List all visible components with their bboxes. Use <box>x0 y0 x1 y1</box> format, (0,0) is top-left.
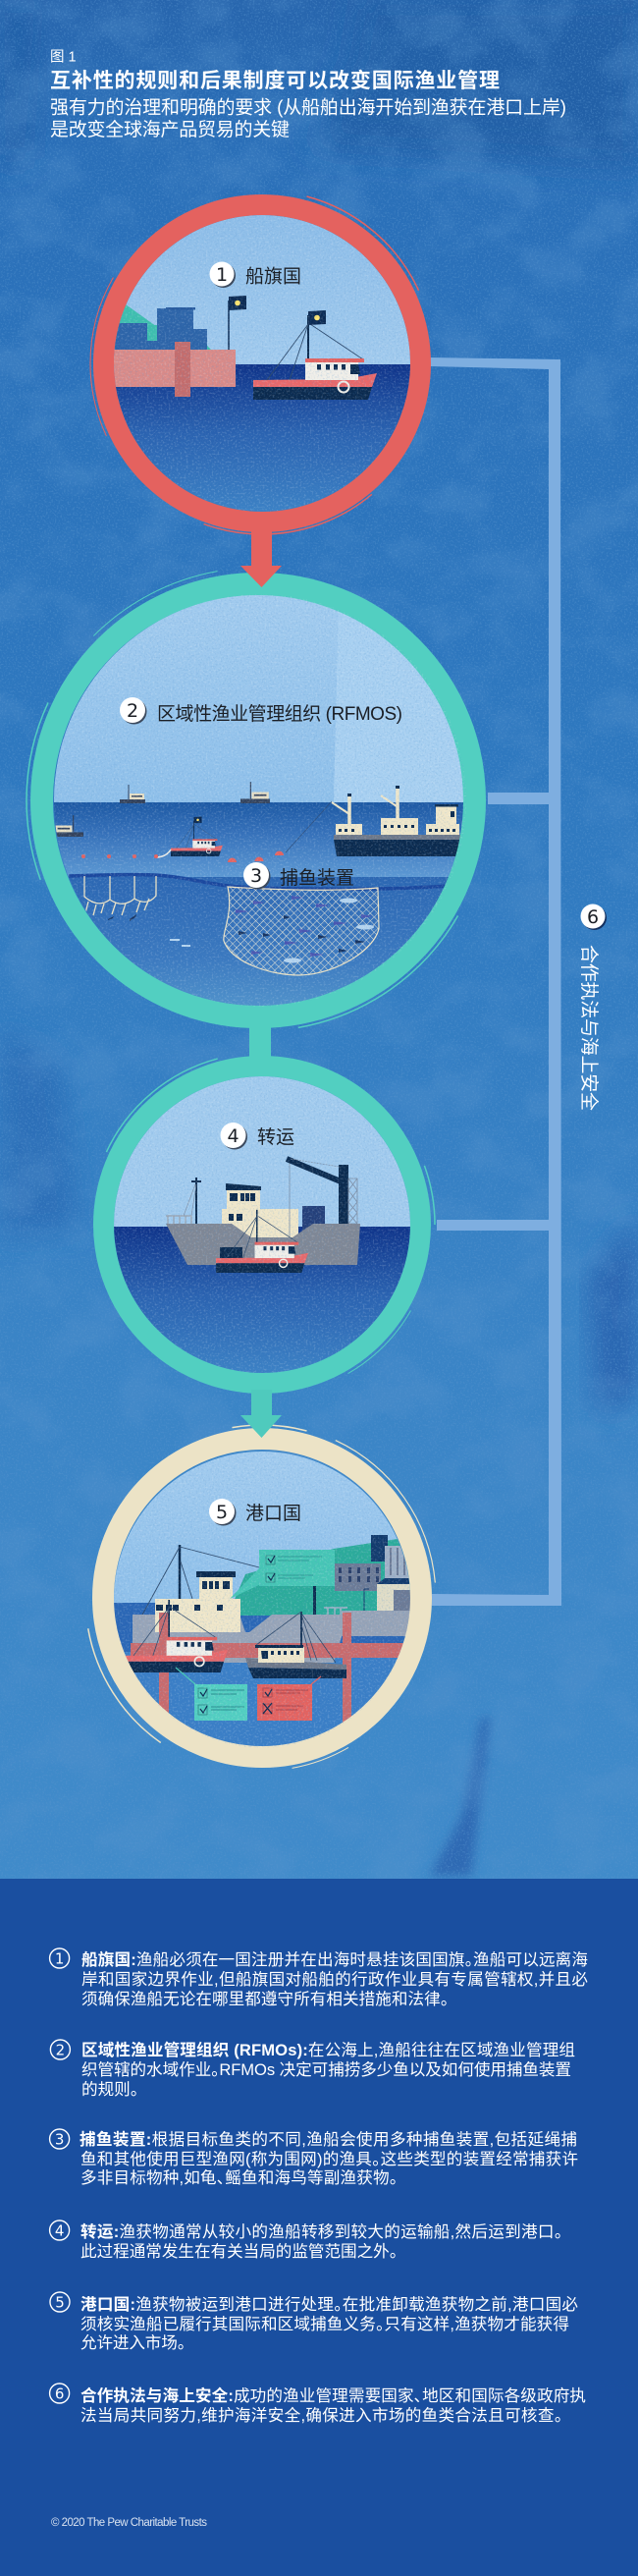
factory ship <box>332 786 463 856</box>
small distant boats <box>54 782 270 837</box>
legend item 2: 区域性渔业管理组织 (RFMOs):在公海上,渔船往往在区域渔业管理组 <box>81 2040 575 2059</box>
grey boat <box>245 1612 346 1678</box>
scene: port state <box>108 1449 417 1755</box>
longline gear <box>84 876 156 915</box>
dock sign: approved <box>230 1550 335 1599</box>
title block: 图 1 <box>50 49 77 65</box>
badge 6 and vertical label <box>578 904 607 1111</box>
legend item 4: 4 <box>55 2221 64 2239</box>
arrow: flag state to RFMOs <box>240 521 282 587</box>
legend item 5: 5 <box>55 2294 65 2312</box>
copyright: © 2020 The Pew Charitable Trusts <box>51 2517 207 2529</box>
label 2: RFMOs: 2 <box>127 700 138 722</box>
ring: RFMOs <box>26 568 491 1033</box>
scene: flag state <box>108 211 417 517</box>
scene: RFMOs and fishing gear <box>49 589 471 1012</box>
label 3: fishing gear: 捕鱼装置 <box>280 867 354 889</box>
legend item 3 <box>50 2129 578 2187</box>
title block <box>50 49 566 140</box>
scene: transshipment <box>108 1070 417 1379</box>
connector: enforcement frame linking rings to label 6 <box>430 357 561 1606</box>
legend item 5: 允许进入市场。 <box>80 2333 186 2352</box>
legend item 1: 船旗国:渔船必须在一国注册并在出海时悬挂该国国旗。渔船可以远离海 <box>81 1949 588 1969</box>
label 4: transshipment: 转运 <box>257 1126 294 1148</box>
legend item 1: 岸和国家边界作业,但船旗国对船舶的行政作业具有专属管辖权,并且必 <box>81 1970 588 1989</box>
legend item 1 <box>50 1948 588 2008</box>
textured blue background <box>0 0 638 1886</box>
ring: port state <box>85 1421 439 1775</box>
label 3: fishing gear <box>243 862 354 890</box>
label 1: flag state: 1 <box>216 264 228 286</box>
legend item 2: 2 <box>56 2041 65 2058</box>
label 3: fishing gear: 3 <box>250 865 262 887</box>
title block: 强有力的治理和明确的要求 (从船舶出海开始到渔获在港口上岸) <box>50 96 566 118</box>
label 4: transshipment <box>220 1123 294 1149</box>
legend item 4 <box>50 2220 562 2261</box>
legend item 4: 转运:渔获物通常从较小的渔船转移到较大的运输船,然后运到港口。 <box>80 2222 562 2241</box>
label 4: transshipment: 4 <box>227 1125 239 1147</box>
legend item 3: 多非目标物种,如龟、鳐鱼和海鸟等副渔获物。 <box>80 2168 398 2187</box>
legend item 6: 6 <box>55 2384 64 2402</box>
legend item 6 <box>50 2384 586 2425</box>
title block: 互补性的规则和后果制度可以改变国际渔业管理 <box>50 69 500 92</box>
badge 6 and vertical label: 合作执法与海上安全 <box>578 945 600 1111</box>
legend item 1: 1 <box>55 1950 64 1968</box>
ring: transshipment <box>89 1052 435 1398</box>
legend item 2: 织管辖的水域作业。RFMOs 决定可捕捞多少鱼以及如何使用捕鱼装置 <box>81 2060 571 2079</box>
badge 6 and vertical label: 6 <box>587 906 599 928</box>
label 1: flag state: 船旗国 <box>245 265 301 287</box>
pier <box>131 1613 404 1725</box>
buoys <box>81 850 284 862</box>
legend item 5: 港口国:渔获物被运到港口进行处理。在批准卸载渔获物之前,港口国必 <box>80 2295 578 2314</box>
legend item 5 <box>50 2292 578 2352</box>
connector stem: RFMOs to transshipment <box>249 1021 271 1063</box>
legend item 5: 须核实渔船已履行其国际和区域捕鱼义务。只有这样,渔获物才能获得 <box>80 2315 569 2333</box>
legend item 4: 此过程通常发生在有关当局的监管范围之外。 <box>80 2242 398 2261</box>
legend item 2 <box>50 2040 575 2099</box>
paperwork: rejected boat <box>257 1676 321 1721</box>
legend item 6: 法当局共同努力,维护海洋安全,确保进入市场的鱼类合法且可核查。 <box>80 2406 562 2425</box>
panel: legend <box>0 1879 638 2576</box>
arrow: transshipment to port state <box>240 1390 282 1438</box>
scene grain overlay <box>49 206 471 1758</box>
paperwork: approved boat <box>176 1668 247 1721</box>
label 5: port state: 港口国 <box>245 1503 301 1524</box>
legend item 3: 捕鱼装置:根据目标鱼类的不同,渔船会使用多种捕鱼装置,包括延绳捕 <box>80 2129 577 2149</box>
title block: 是改变全球海产品贸易的关键 <box>50 119 290 140</box>
label 2: RFMOs: 区域性渔业管理组织 (RFMOS) <box>157 703 402 725</box>
legend item 2: 的规则。 <box>81 2080 138 2099</box>
label 5: port state: 5 <box>216 1502 228 1523</box>
legend item 6: 合作执法与海上安全:成功的渔业管理需要国家、地区和国际各级政府执 <box>80 2385 586 2405</box>
label 1: flag state <box>210 261 301 288</box>
label 5: port state <box>209 1499 301 1526</box>
legend item 3: 3 <box>55 2131 64 2149</box>
legend item 1: 须确保渔船无论在哪里都遵守所有相关措施和法律。 <box>81 1990 449 2008</box>
label 2: RFMOs <box>120 697 402 725</box>
legend item 3: 鱼和其他使用巨型渔网(称为围网)的渔具。这些类型的装置经常捕获许 <box>80 2150 578 2168</box>
ring: flag state <box>89 191 435 536</box>
purse seine net <box>224 887 379 975</box>
